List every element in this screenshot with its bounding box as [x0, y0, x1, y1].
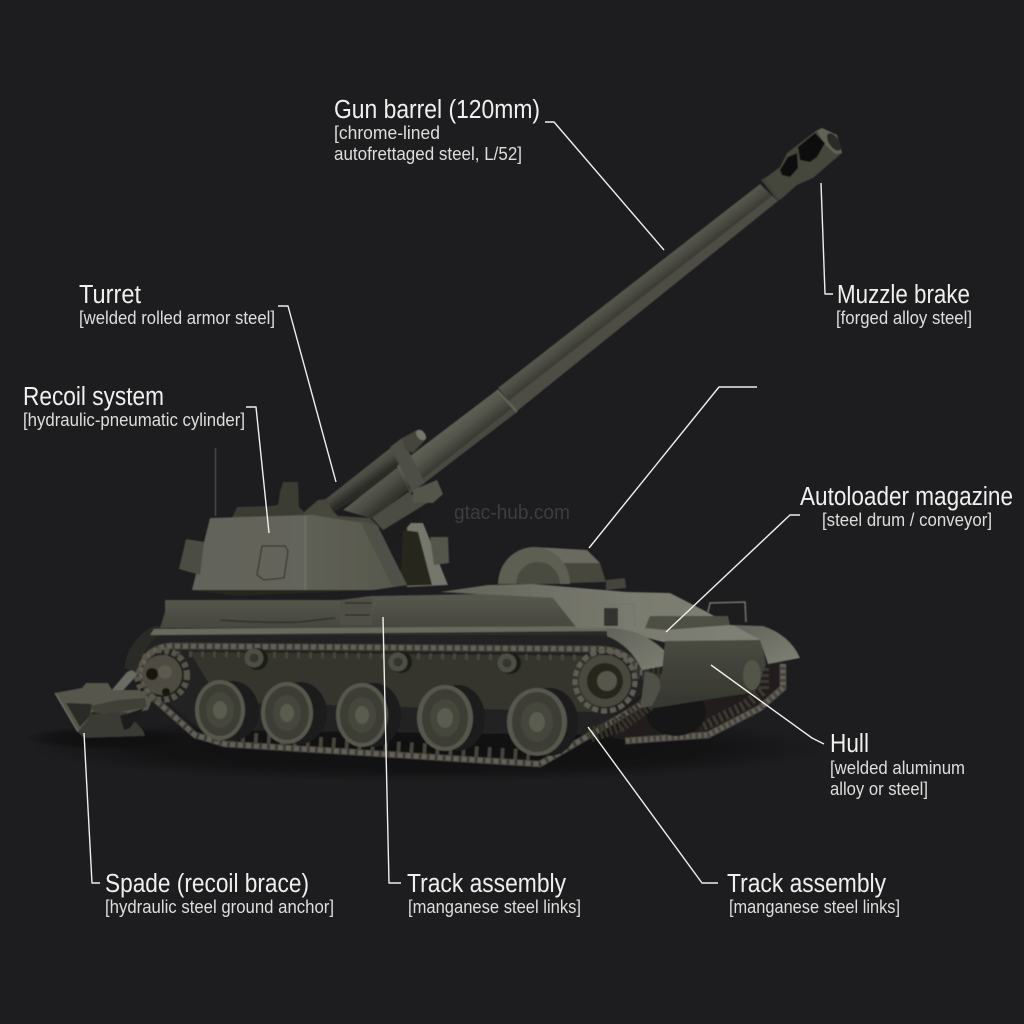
antenna [214, 448, 216, 516]
road wheel 2 [261, 682, 327, 744]
label: autoloader magazine: [steel drum / conveyor] [822, 510, 992, 530]
clamp bracket [413, 480, 443, 503]
spade recoil brace [55, 668, 152, 738]
label: gun barrel: [chrome-lined [334, 123, 440, 143]
label: track assembly left: [manganese steel links] [408, 897, 581, 917]
front drive wheel [575, 651, 635, 711]
cradle shadow [372, 500, 433, 548]
front fender left [607, 628, 676, 670]
watermark: gtac-hub.com [454, 501, 570, 524]
label: muzzle brake: [forged alloy steel] [836, 308, 972, 328]
turret front edge [360, 521, 407, 586]
hull lower side [140, 632, 650, 735]
turret body [192, 515, 407, 595]
muzzle brake [765, 128, 844, 200]
turret base shadow [192, 590, 374, 596]
leader line: muzzle brake [821, 183, 833, 294]
gun barrel sleeve [397, 390, 517, 494]
label: autoloader magazine [800, 483, 1013, 530]
label: gun barrel [334, 96, 540, 164]
road wheel 5 [507, 688, 578, 756]
road wheel 3 [336, 683, 401, 747]
barrel clamp [390, 438, 425, 490]
label: hull [830, 730, 965, 799]
leader line: hull [711, 665, 824, 744]
turret roof equipment [232, 482, 306, 522]
return rollers [244, 648, 521, 674]
label: turret: Turret [79, 281, 141, 309]
gun barrel and recoil system [322, 175, 785, 548]
label: recoil system: [hydraulic-pneumatic cylinder] [23, 410, 245, 430]
label: track assembly right: [manganese steel links] [729, 897, 900, 917]
label: muzzle brake: Muzzle brake [837, 281, 970, 309]
deck fittings [590, 602, 746, 628]
leader line: spade [84, 733, 100, 883]
rear fender [124, 626, 612, 672]
leader line: autoloader magazine [666, 515, 800, 632]
label: recoil system [23, 383, 245, 430]
label: turret [79, 281, 275, 328]
label: hull: Hull [830, 730, 869, 758]
leader line: track assembly left [383, 617, 401, 883]
label: recoil system: Recoil system [23, 383, 164, 411]
leader line: unlabelled drum [589, 387, 757, 548]
leader line: recoil system [246, 407, 269, 533]
tank illustration [55, 128, 844, 764]
gun mantlet [303, 499, 380, 528]
cradle box [372, 492, 427, 530]
recoil cylinder lower [343, 468, 420, 519]
clamp cap face [414, 428, 428, 442]
label: track assembly left: Track assembly [407, 870, 566, 898]
label: muzzle brake [836, 281, 972, 328]
label: gun barrel: autofrettaged steel, L/52] [334, 144, 522, 164]
turret rear mount [400, 523, 449, 587]
hatch outline [257, 546, 288, 580]
label: hull: [welded aluminum [830, 758, 965, 778]
sleeve collar [497, 390, 517, 412]
gun barrel tube [498, 184, 778, 411]
road wheel 1 [195, 680, 259, 741]
leader line: track assembly right [588, 727, 718, 883]
label: track assembly right: Track assembly [727, 870, 886, 898]
road wheels [195, 680, 578, 756]
ground shadow [25, 714, 830, 782]
label: hull: alloy or steel] [830, 779, 928, 799]
deck step [645, 616, 730, 630]
front fender right [733, 625, 800, 664]
muzzle collar [761, 175, 785, 201]
far side track [612, 662, 783, 742]
hull side plate shading [190, 652, 610, 712]
autoloader magazine drum [498, 547, 626, 590]
clamp cap [402, 430, 427, 453]
road wheel 4 [417, 685, 485, 751]
label: spade [105, 870, 334, 917]
label: turret: [welded rolled armor steel] [79, 308, 275, 328]
rear sprocket [137, 650, 187, 700]
leader line: gun barrel [545, 122, 664, 250]
front glacis hull [640, 640, 766, 709]
recoil cylinder upper [322, 446, 405, 514]
label: track assembly left [407, 870, 581, 917]
label: spade: Spade (recoil brace) [105, 870, 309, 898]
label: track assembly right [727, 870, 900, 917]
turret [179, 448, 407, 596]
turret side stowage drum [179, 539, 204, 575]
hull top deck [440, 584, 765, 642]
upper hull side [150, 594, 612, 635]
track assembly near side [140, 646, 662, 764]
label: spade: [hydraulic steel ground anchor] [105, 897, 334, 917]
label: gun barrel: Gun barrel (120mm) [334, 96, 540, 124]
leader line: turret [278, 306, 336, 482]
